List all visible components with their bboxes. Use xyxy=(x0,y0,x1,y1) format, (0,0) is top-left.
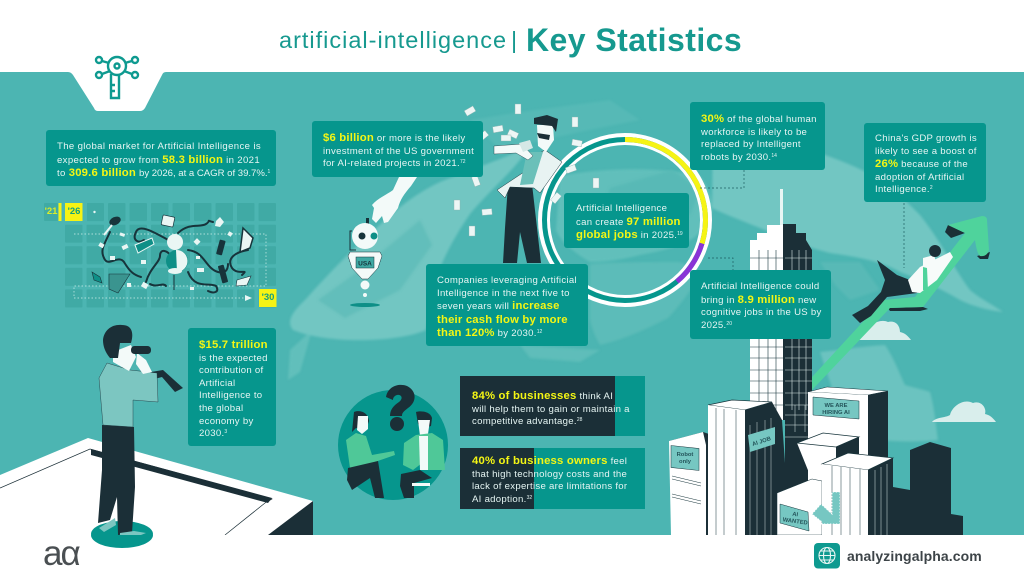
text block: global economy: economy by xyxy=(199,416,254,427)
text block: workforce: 30% of the global human xyxy=(701,113,817,125)
text block: China GDP: Intelligence.2 xyxy=(875,184,933,195)
illustration: person with binoculars xyxy=(0,325,313,547)
text block: US government investment: for AI-related projects in 2021.72 xyxy=(323,158,466,169)
text block: cash flow xyxy=(426,264,588,346)
text block: China GDP xyxy=(864,123,986,202)
text block: cash flow: Intelligence in the next five to xyxy=(437,288,570,299)
illustration: cloud near arrow xyxy=(847,321,911,340)
text block: cognitive jobs: Artificial Intelligence could xyxy=(701,281,820,292)
world map background xyxy=(288,100,1003,442)
title xyxy=(279,22,742,58)
illustration: hand holding coin xyxy=(372,177,417,223)
text block: global economy: contribution of xyxy=(199,365,263,376)
text block: workforce xyxy=(690,102,825,170)
text block: China GDP: 26% because of the xyxy=(875,158,968,170)
text block: China GDP: likely to see a boost of xyxy=(875,146,977,157)
illustration: city buildings: Robot xyxy=(677,452,693,458)
stat bar: 84 percent of businesses: competitive advantage.28 xyxy=(472,416,582,427)
text block: global economy: Intelligence to xyxy=(199,390,262,401)
text block: cash flow: seven years will increase xyxy=(437,300,560,312)
icon: key with nodes xyxy=(96,57,138,98)
illustration: growth arrow xyxy=(812,216,990,390)
text block: global economy: 2030.3 xyxy=(199,428,227,439)
callout connectors xyxy=(700,170,904,272)
text block: US government investment: $6 billion or more is the likely xyxy=(323,132,465,144)
text block: US government investment xyxy=(312,121,483,177)
stat bar: 40 percent of business owners: 40% of business owners feel xyxy=(472,455,627,467)
illustration: city buildings: AI JOB xyxy=(752,436,772,448)
dark continent shading xyxy=(318,170,880,318)
text block: cognitive jobs: bring in 8.9 million new xyxy=(701,294,816,306)
illustration: man relaxing on arrow xyxy=(852,245,953,323)
text block: global economy: Artificial xyxy=(199,378,235,389)
text block: global jobs: Artificial Intelligence xyxy=(576,203,667,214)
title: Key Statistics xyxy=(526,22,742,58)
text block: global market: The global market for Artificial Intelligence is xyxy=(57,141,261,152)
text block: China GDP: adoption of Artificial xyxy=(875,172,964,183)
year label 2021: '21 xyxy=(45,206,57,217)
illustration: businessman with money xyxy=(494,115,562,263)
stat bar: 84 percent of businesses: will help them to gain or maintain a xyxy=(472,404,630,415)
stat bar: 84 percent of businesses: 84% of businesses think AI xyxy=(472,390,613,402)
text block: global economy: the global xyxy=(199,403,243,414)
title: | xyxy=(511,27,517,53)
illustration: city buildings: WE ARE xyxy=(825,403,848,409)
illustration: USA robot: USA xyxy=(358,260,372,268)
stat bar: 40 percent of business owners: AI adoption.32 xyxy=(472,494,532,505)
stat bar: 40 percent of business owners: lack of expertise are limitations for xyxy=(472,481,627,492)
text block: global jobs: global jobs in 2025.19 xyxy=(576,229,683,241)
text block: cognitive jobs: cognitive jobs in the US by xyxy=(701,307,822,318)
year label 2030: '30 xyxy=(262,292,274,303)
text block: global market xyxy=(46,130,276,186)
text block: China GDP: China's GDP growth is xyxy=(875,133,977,144)
stat bar: 40 percent of business owners xyxy=(460,448,645,509)
footer band xyxy=(0,535,1024,576)
illustration: city buildings: only xyxy=(679,459,692,465)
illustration: cloud right xyxy=(932,401,996,422)
illustration: skyscraper xyxy=(750,189,812,420)
text block: global jobs: can create 97 million xyxy=(576,216,681,228)
stat bar: 40 percent of business owners: that high technology costs and the xyxy=(472,469,627,480)
illustration: city buildings: WANTED xyxy=(782,517,808,527)
title: artificial-intelligence xyxy=(279,27,507,53)
ring chart xyxy=(544,139,706,301)
illustration: city buildings: HIRING AI xyxy=(822,410,850,416)
website url: analyzingalpha.com xyxy=(847,548,982,564)
text block: global economy xyxy=(188,328,276,446)
illustration: city buildings xyxy=(669,387,963,535)
text block: workforce: robots by 2030.14 xyxy=(701,152,777,163)
text block: cash flow: their cash flow by more xyxy=(437,314,568,326)
stat bar: 84 percent of businesses xyxy=(460,376,645,436)
text block: global economy: $15.7 trillion xyxy=(199,339,268,351)
text block: global market: to 309.6 billion by 2026, at a CAGR of 39.7%.1 xyxy=(57,167,270,179)
text block: cash flow: Companies leveraging Artificial xyxy=(437,275,577,286)
year label 2026: '26 xyxy=(68,206,80,217)
text block: cognitive jobs xyxy=(690,270,831,339)
text block: global economy: is the expected xyxy=(199,353,268,364)
text block: US government investment: investment of the US government xyxy=(323,146,474,157)
illustration: city buildings: AI xyxy=(792,512,799,518)
text block: global market: expected to grow from 58.3 billion in 2021 xyxy=(57,154,260,166)
text block: cognitive jobs: 2025.20 xyxy=(701,320,732,331)
icon: globe xyxy=(814,543,840,568)
illustration: robot with cables xyxy=(92,215,253,293)
chart: year grid xyxy=(44,203,277,308)
illustration: two people talking xyxy=(338,385,448,500)
text block: global jobs xyxy=(564,193,689,248)
text block: workforce: replaced by Intelligent xyxy=(701,139,801,150)
text block: cash flow: than 120% by 2030.12 xyxy=(437,327,542,339)
text block: workforce: workforce is likely to be xyxy=(701,127,807,138)
header band xyxy=(0,0,1024,111)
illustration: USA robot xyxy=(348,218,382,307)
icons: flying banknotes xyxy=(454,104,599,236)
logo: aα xyxy=(43,534,79,573)
